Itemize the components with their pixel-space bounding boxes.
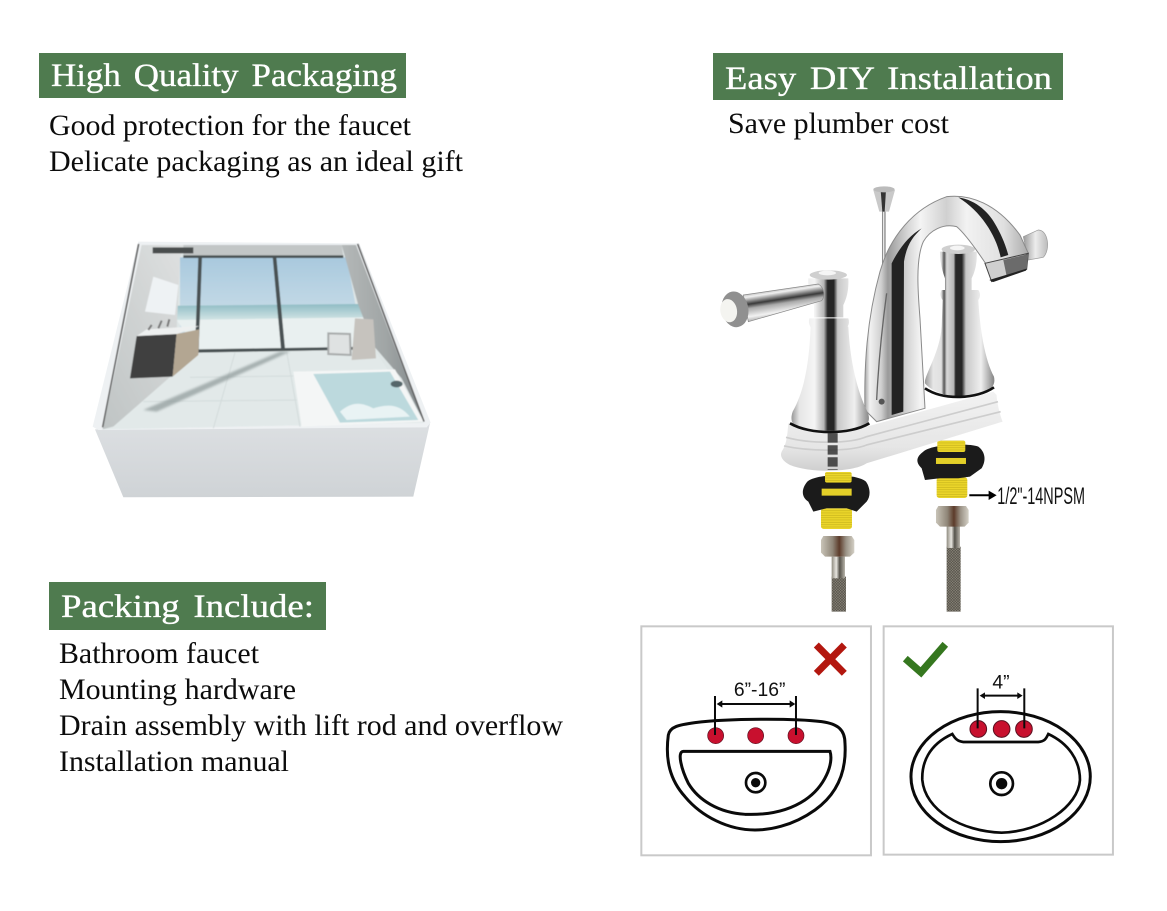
left handle xyxy=(718,270,869,432)
spout aerator xyxy=(985,253,1028,282)
heading: Packing Include xyxy=(49,582,326,630)
heading: Easy DIY Installation: Easy DIY Installation xyxy=(725,61,1052,97)
icon: green check xyxy=(905,644,945,672)
text block: packing list xyxy=(59,637,563,778)
box printed room scene xyxy=(103,244,424,429)
text block: packaging benefits: Good protection for the faucet xyxy=(49,109,412,142)
spec label with arrow: 1/2"-14NPSM: 1/2"-14NPSM xyxy=(997,483,1085,510)
text block: packaging benefits: Delicate packaging as an ideal gift xyxy=(49,145,464,178)
heading: High Quality Packaging: High Quality Packaging xyxy=(51,58,397,94)
text block: packaging benefits xyxy=(49,109,464,178)
yellow threaded shanks and black nuts xyxy=(803,441,985,529)
panel: incorrect 6-16 inch spacing xyxy=(641,626,871,855)
text block: packing list: Installation manual xyxy=(59,745,289,778)
heading: Easy DIY Installation xyxy=(713,53,1063,100)
chrome bathroom faucet photo xyxy=(718,186,1085,612)
panel: correct 4 inch spacing xyxy=(884,626,1113,855)
text block: save plumber cost: Save plumber cost xyxy=(728,107,950,140)
heading: Packing Include: Packing Include: xyxy=(61,589,314,625)
faucet base plate xyxy=(781,392,1003,471)
packaging box photo xyxy=(93,242,431,497)
text block: packing list: Bathroom faucet xyxy=(59,637,260,670)
box lid flaps xyxy=(93,242,431,430)
rear knob of spout xyxy=(1023,230,1048,260)
supply hoses xyxy=(821,506,969,612)
text block: packing list: Drain assembly with lift rod and overflow xyxy=(59,709,563,742)
dimension: 6 to 16 inches xyxy=(715,680,796,735)
sink hole spacing diagrams xyxy=(641,626,1113,855)
spec label with arrow: 1/2"-14NPSM xyxy=(969,483,1085,510)
dimension: 4 inches xyxy=(978,672,1024,728)
sink outline with three holes xyxy=(667,719,845,830)
dimension: 4 inches: 4” xyxy=(992,672,1010,693)
right handle xyxy=(925,245,994,397)
box front face xyxy=(95,423,430,497)
arched spout xyxy=(865,196,1028,422)
text block: packing list: Mounting hardware xyxy=(59,673,296,706)
icon: red cross xyxy=(816,645,844,673)
sink outline with three holes xyxy=(911,712,1090,842)
dimension: 6 to 16 inches: 6”-16” xyxy=(734,680,785,701)
lift rod xyxy=(873,186,895,263)
